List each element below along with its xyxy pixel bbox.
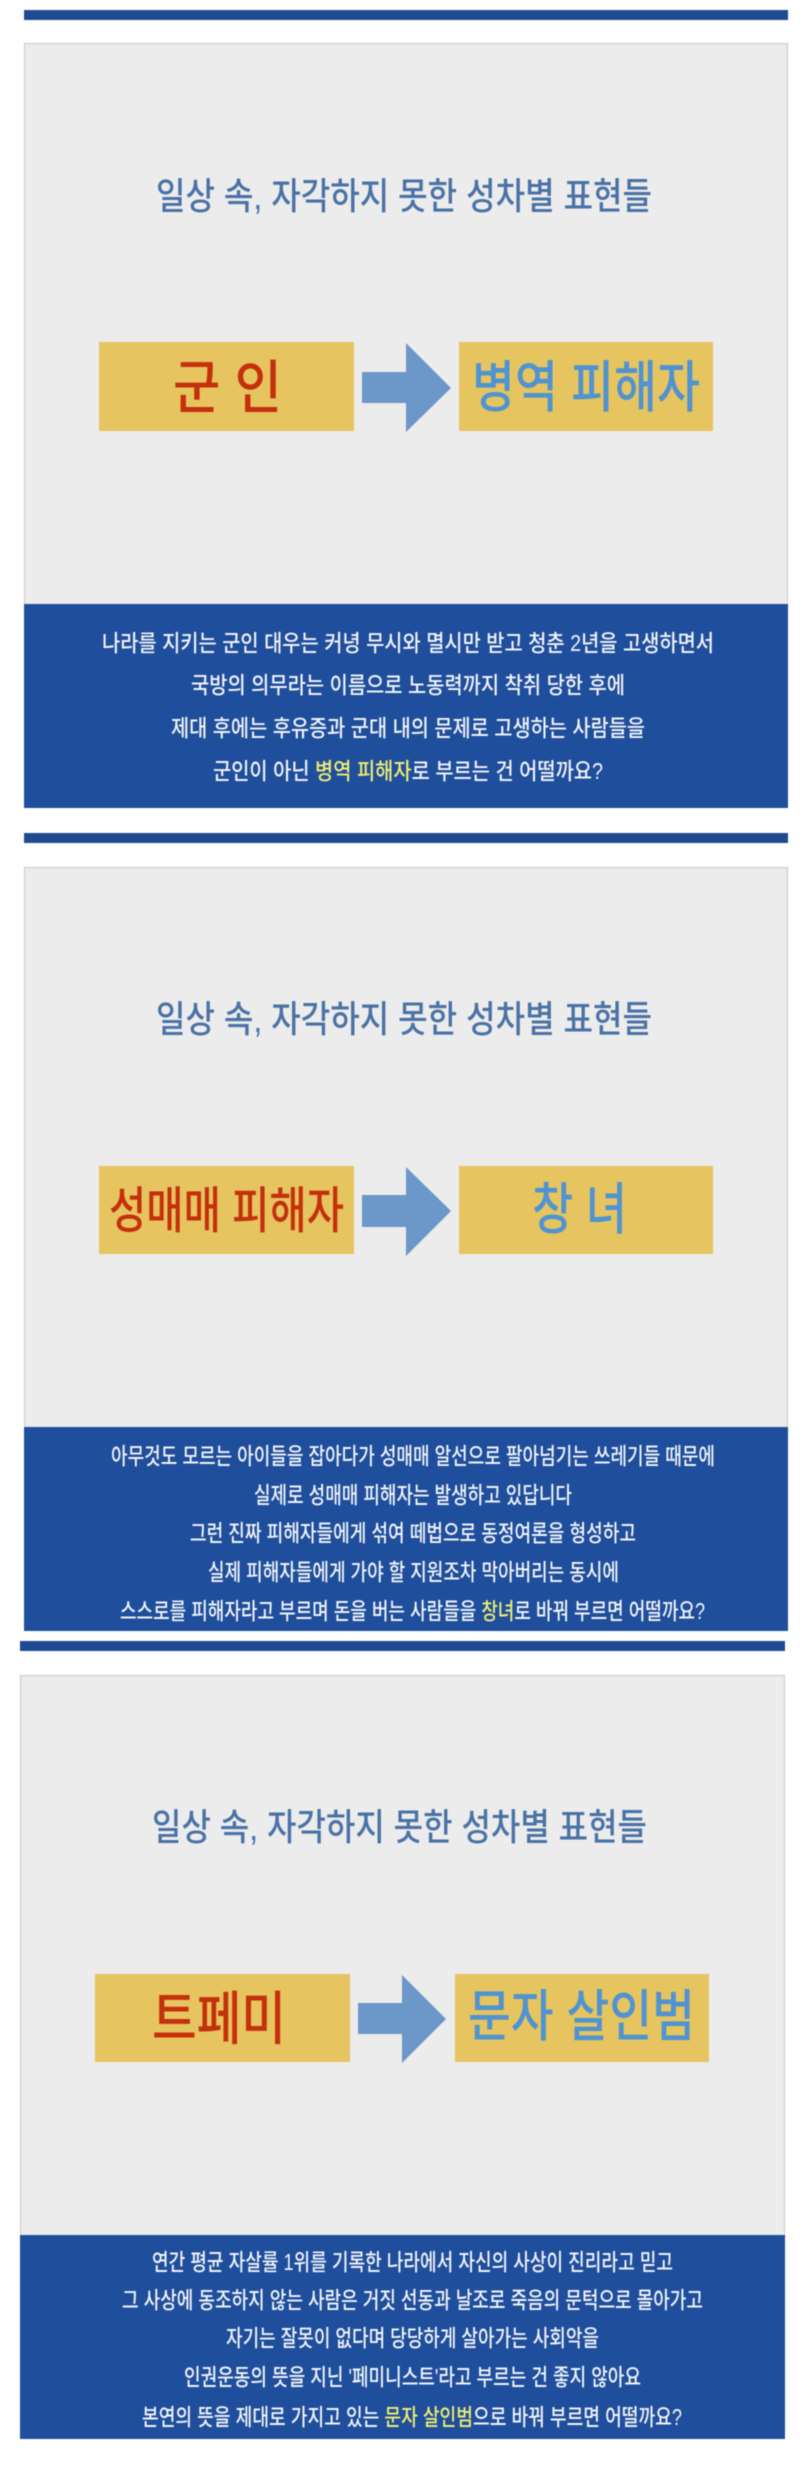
divider bar 3 [20,1641,785,1651]
text block: explanation: 인권운동의 뜻을 지닌 '페미니스트'라고 부르는 건 좋지 않아요 [184,2364,641,2390]
text block: explanation [20,2235,785,2439]
text block: explanation: 국방의 의무라는 이름으로 노동력까지 착취 당한 후에 [191,672,625,698]
box: replacement term [455,1974,709,2062]
text block: explanation: 실제로 성매매 피해자는 발생하고 있답니다 [254,1482,572,1508]
arrow [362,1167,451,1256]
text block: explanation: 본연의 뜻을 제대로 가지고 있는 문자 살인범으로 바꿔 부르면 어떨까요? [142,2404,682,2430]
text block: explanation: 자기는 잘못이 없다며 당당하게 살아가는 사회악을 [226,2325,599,2351]
box: replacement term: 병역 피해자 [472,356,700,419]
panel background [24,44,788,606]
heading: 일상 속, 자각하지 못한 성차별 표현들 [156,176,652,217]
divider bar 2 [24,833,788,843]
box: replacement term: 창 녀 [532,1178,627,1241]
text block: explanation: 실제 피해자들에게 가야 할 지원조차 막아버리는 동시에 [208,1559,619,1585]
panel background [24,868,788,1428]
box: original term [99,342,354,431]
box: replacement term: 문자 살인범 [468,1985,695,2048]
box: original term: 트페미 [152,1987,286,2052]
heading: 일상 속, 자각하지 못한 성차별 표현들 [156,999,652,1040]
panel background [20,1676,784,2236]
arrow [362,343,451,432]
text block: explanation: 나라를 지키는 군인 대우는 커녕 무시와 멸시만 받고 청춘 2년을 고생하면서 [102,630,714,656]
divider bar 1 [24,10,788,20]
text block: explanation: 스스로를 피해자라고 부르며 돈을 버는 사람들을 창녀로 바꿔 부르면 어떨까요? [120,1598,705,1624]
panel: 군인 to 병역 피해자 [24,44,788,808]
text block: explanation [24,1427,788,1631]
box: original term: 성매매 피해자 [109,1183,344,1239]
box: original term [95,1974,350,2062]
arrow [358,1975,446,2063]
box: original term: 군 인 [173,356,282,421]
panel: 성매매 피해자 to 창녀 [24,868,788,1631]
text block: explanation: 군인이 아닌 병역 피해자로 부르는 건 어떨까요? [213,758,603,784]
text block: explanation [24,604,788,808]
heading: 일상 속, 자각하지 못한 성차별 표현들 [152,1807,647,1848]
text block: explanation: 제대 후에는 후유증과 군대 내의 문제로 고생하는 사람들을 [171,715,645,741]
panel: 트페미 to 문자 살인범 [20,1676,785,2439]
text block: explanation: 연간 평균 자살률 1위를 기록한 나라에서 자신의 사상이 진리라고 믿고 [152,2249,673,2275]
text block: explanation: 그런 진짜 피해자들에게 섞여 떼법으로 동정여론을 형성하고 [190,1520,636,1546]
box: replacement term [459,342,713,431]
box: original term [99,1166,354,1254]
box: replacement term [459,1166,713,1254]
